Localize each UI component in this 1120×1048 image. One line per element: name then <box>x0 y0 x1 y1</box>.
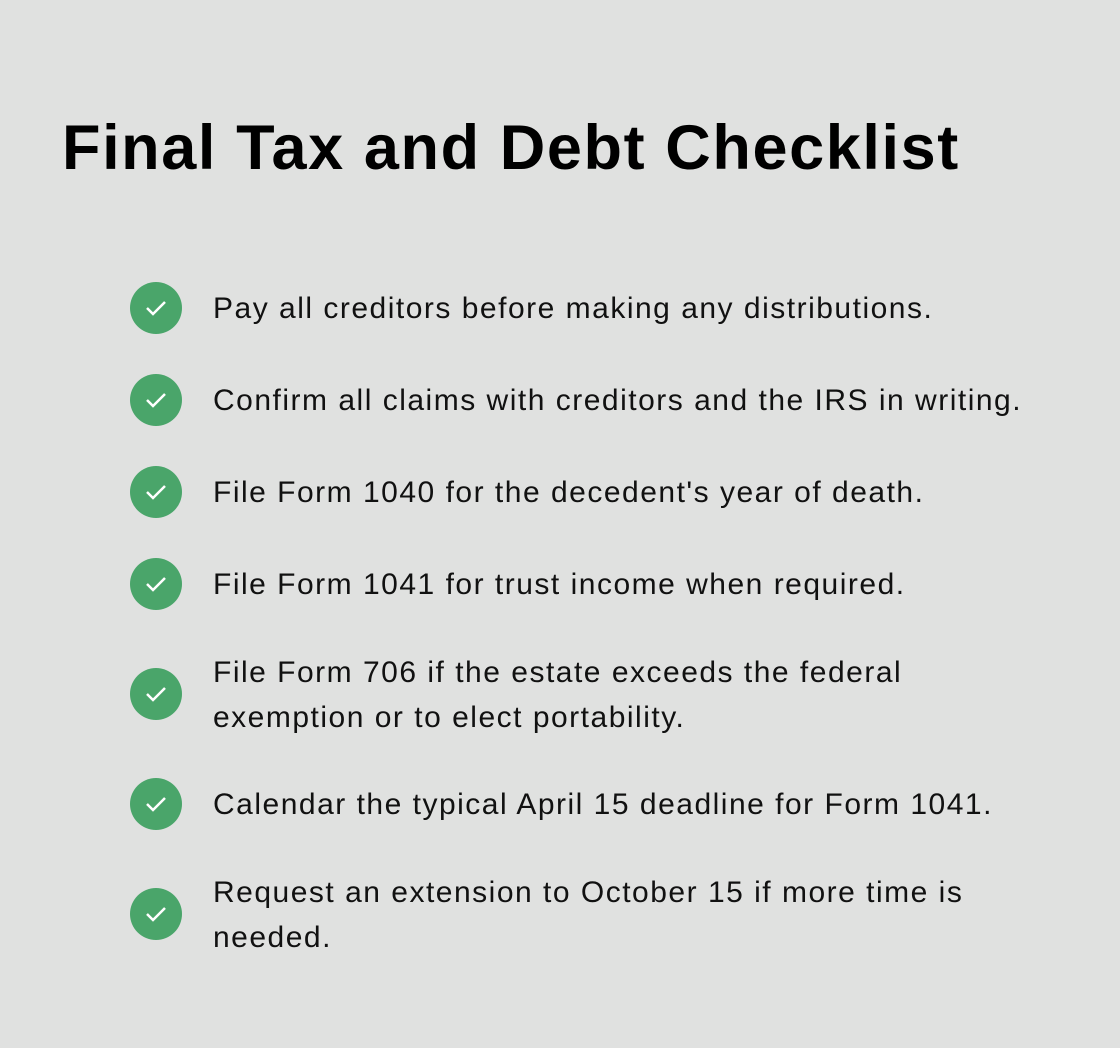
item 6 <box>130 778 993 830</box>
item 7: Request an extension to October 15 if more time is <box>213 876 963 909</box>
item 5: exemption or to elect portability. <box>213 701 685 734</box>
title: Final Tax and Debt Checklist <box>62 113 960 183</box>
item 7 <box>130 876 963 954</box>
item 4 <box>130 558 906 610</box>
item 2 <box>130 374 1022 426</box>
item 6: Calendar the typical April 15 deadline for Form 1041. <box>213 788 993 821</box>
item 1: Pay all creditors before making any distributions. <box>213 292 933 325</box>
item 2: Confirm all claims with creditors and the IRS in writing. <box>213 384 1022 417</box>
item 7: needed. <box>213 921 332 954</box>
item 3 <box>130 466 924 518</box>
item 4: File Form 1041 for trust income when required. <box>213 568 906 601</box>
item 3: File Form 1040 for the decedent's year of death. <box>213 476 924 509</box>
item 5 <box>130 656 902 734</box>
item 1 <box>130 282 933 334</box>
item 5: File Form 706 if the estate exceeds the federal <box>213 656 902 689</box>
